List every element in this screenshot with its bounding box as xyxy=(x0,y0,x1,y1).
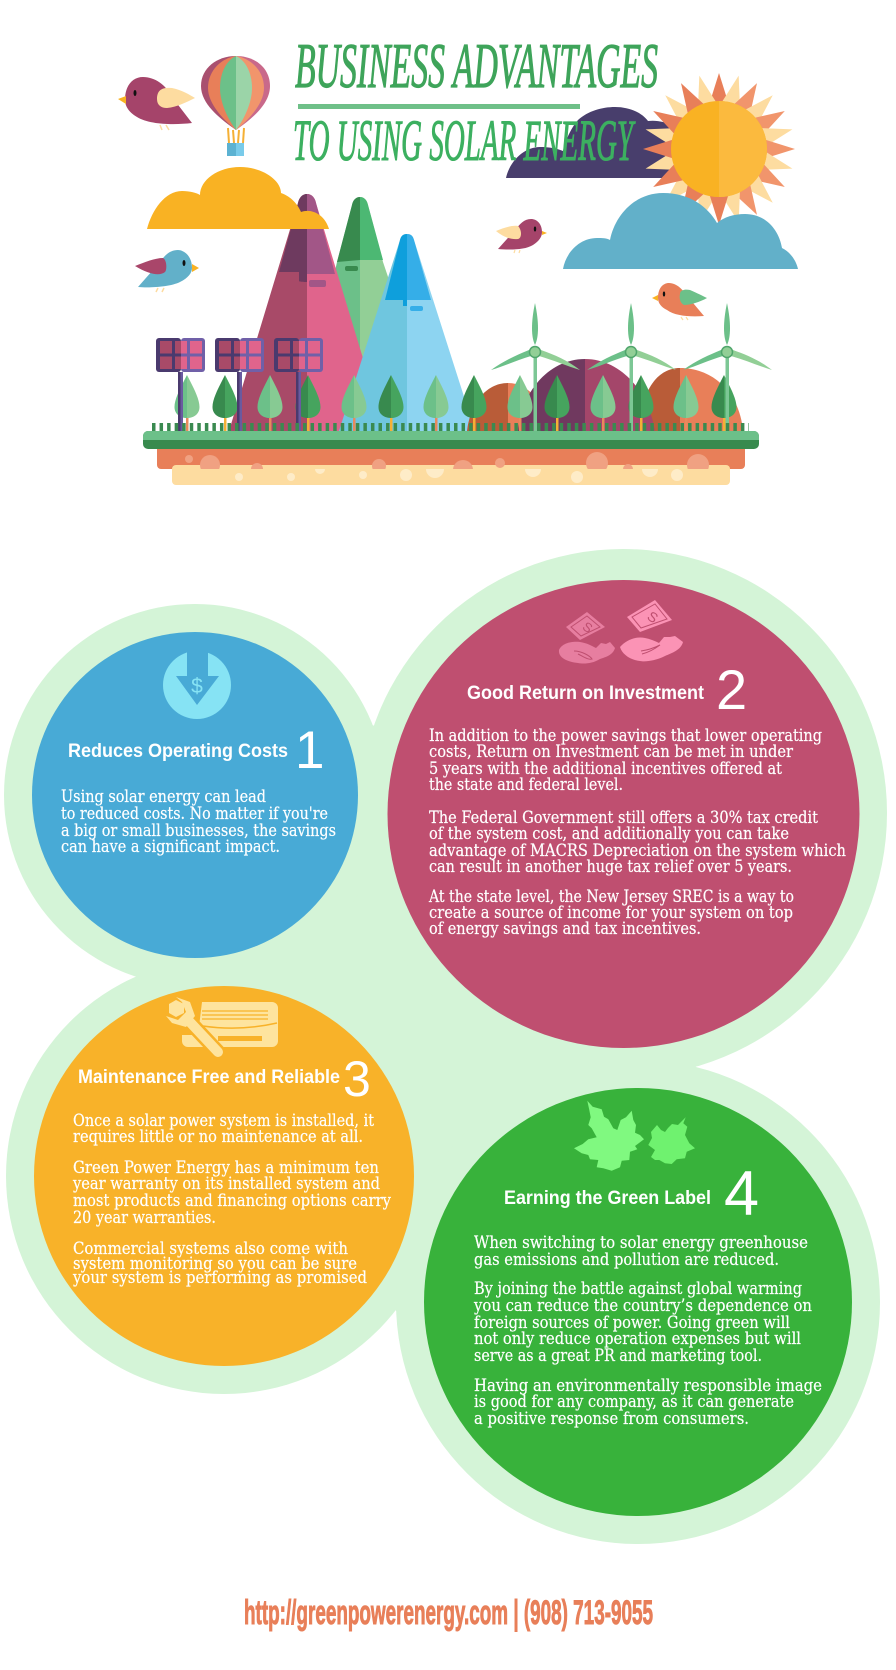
text: panel 1 body: can have a significant impact. xyxy=(61,837,280,856)
illustration: solar landscape header xyxy=(118,56,798,485)
text: panel 2 body: advantage of MACRS Depreciation on the system which xyxy=(429,841,846,860)
text: panel 3 body: system monitoring so you can be sure xyxy=(73,1254,357,1273)
text: panel 2 body xyxy=(428,726,846,938)
icon: maple leaves xyxy=(574,1101,695,1171)
icon: blue cloud xyxy=(563,193,798,269)
icon: down arrow with dollar xyxy=(163,650,231,719)
text: panel 2 body: of energy savings and tax incentives. xyxy=(429,919,701,938)
icon: grass strip xyxy=(152,423,749,431)
panel: reduces operating costs xyxy=(32,632,358,958)
icon: green mountain xyxy=(300,197,440,431)
text: panel 2 body: the state and federal level. xyxy=(429,775,623,794)
icon: background hills xyxy=(467,359,743,431)
icon: row of trees xyxy=(174,375,736,431)
text: panel 2 body: costs, Return on Investment can be met in under xyxy=(429,742,793,761)
text: panel 1 body: Using solar energy can lead xyxy=(61,787,266,806)
text: panel 4 body: foreign sources of power. Going green will xyxy=(474,1313,790,1332)
text: panel 2 body: can result in another huge tax relief over 5 years. xyxy=(429,857,792,876)
text: panel 2 body: of the system cost, and additionally you can take xyxy=(429,824,789,843)
text: panel 1 body xyxy=(61,787,336,856)
text: panel 3 body: most products and financing options carry xyxy=(73,1191,392,1210)
icon: hands and money: S xyxy=(644,608,661,626)
number 3: 3 xyxy=(343,1051,371,1107)
pale green background blob xyxy=(4,549,887,1544)
number 2: 2 xyxy=(716,658,747,721)
panel: maintenance free and reliable xyxy=(34,986,414,1366)
text: panel 4 body: Having an environmentally responsible image xyxy=(474,1376,822,1395)
icon: blue mountain xyxy=(339,234,475,431)
text: panel 4 body: not only reduce operation expenses but will xyxy=(474,1329,801,1348)
icon: down arrow with dollar: $ xyxy=(191,675,203,698)
text: panel 3 body xyxy=(72,1111,392,1287)
title divider bar xyxy=(298,104,580,109)
text: panel 3 body: your system is performing as promised xyxy=(72,1268,367,1287)
text: panel 2 body: create a source of income for your system on top xyxy=(429,903,793,922)
text: panel 4 body: When switching to solar energy greenhouse xyxy=(474,1233,808,1252)
icon: hands and money xyxy=(559,600,683,664)
icon: layered ground xyxy=(143,431,759,485)
text: panel 2 body: The Federal Government still offers a 30% tax credit xyxy=(429,808,818,827)
text: panel 4 body xyxy=(473,1233,822,1428)
text: panel 3 body: year warranty on its installed system and xyxy=(72,1174,380,1193)
icon: wrench and card xyxy=(166,997,278,1052)
icon: small maroon bird xyxy=(496,219,547,253)
text: panel 3 body: 20 year warranties. xyxy=(73,1208,216,1227)
text: panel 2 body: 5 years with the additional incentives offered at xyxy=(429,759,782,778)
icon: hands and money: S xyxy=(580,619,596,636)
text: panel 3 body: Green Power Energy has a minimum ten xyxy=(73,1158,379,1177)
text: panel 2 body: In addition to the power savings that lower operating xyxy=(429,726,822,745)
text: panel 3 body: Commercial systems also come with xyxy=(73,1239,348,1258)
icon: sun xyxy=(643,73,795,225)
text: panel 4 body: serve as a great PR and marketing tool. xyxy=(474,1346,762,1365)
text: panel 4 body: gas emissions and pollution are reduced. xyxy=(474,1250,779,1269)
panel: good return on investment xyxy=(388,580,860,1048)
icon: maroon bird xyxy=(118,77,195,130)
heading: earning the green label: Earning the Green Label xyxy=(504,1188,711,1209)
panel: earning the green label xyxy=(424,1088,852,1516)
icon: purple cloud xyxy=(506,107,680,178)
icon: wind turbines xyxy=(491,303,772,431)
icon: solar panels xyxy=(156,338,323,431)
text: panel 4 body: a positive response from consumers. xyxy=(474,1409,749,1428)
text: panel 3 body: Once a solar power system is installed, it xyxy=(73,1111,374,1130)
icon: hot air balloon xyxy=(201,56,270,156)
text: panel 4 body: By joining the battle against global warming xyxy=(474,1279,802,1298)
text: panel 1 body: to reduced costs. No matter if you're xyxy=(61,804,328,823)
icon: blue bird xyxy=(135,250,199,292)
text: panel 4 body: you can reduce the country’s dependence on xyxy=(473,1296,812,1315)
heading: reduces operating costs: Reduces Operating Costs xyxy=(68,741,288,762)
text: panel 4 body: is good for any company, as it can generate xyxy=(474,1392,794,1411)
heading: maintenance free and reliable: Maintenance Free and Reliable xyxy=(78,1067,340,1088)
text: panel 3 body: requires little or no maintenance at all. xyxy=(73,1127,363,1146)
icon: maroon mountain xyxy=(229,194,385,431)
heading: good return on investment: Good Return on Investment xyxy=(467,683,705,704)
number 1: 1 xyxy=(295,721,324,780)
icon: yellow cloud xyxy=(147,167,329,229)
number 4: 4 xyxy=(724,1159,759,1229)
text: panel 2 body: At the state level, the New Jersey SREC is a way to xyxy=(428,887,794,906)
text: panel 1 body: a big or small businesses, the savings xyxy=(61,821,336,840)
icon: orange bird xyxy=(652,283,707,320)
